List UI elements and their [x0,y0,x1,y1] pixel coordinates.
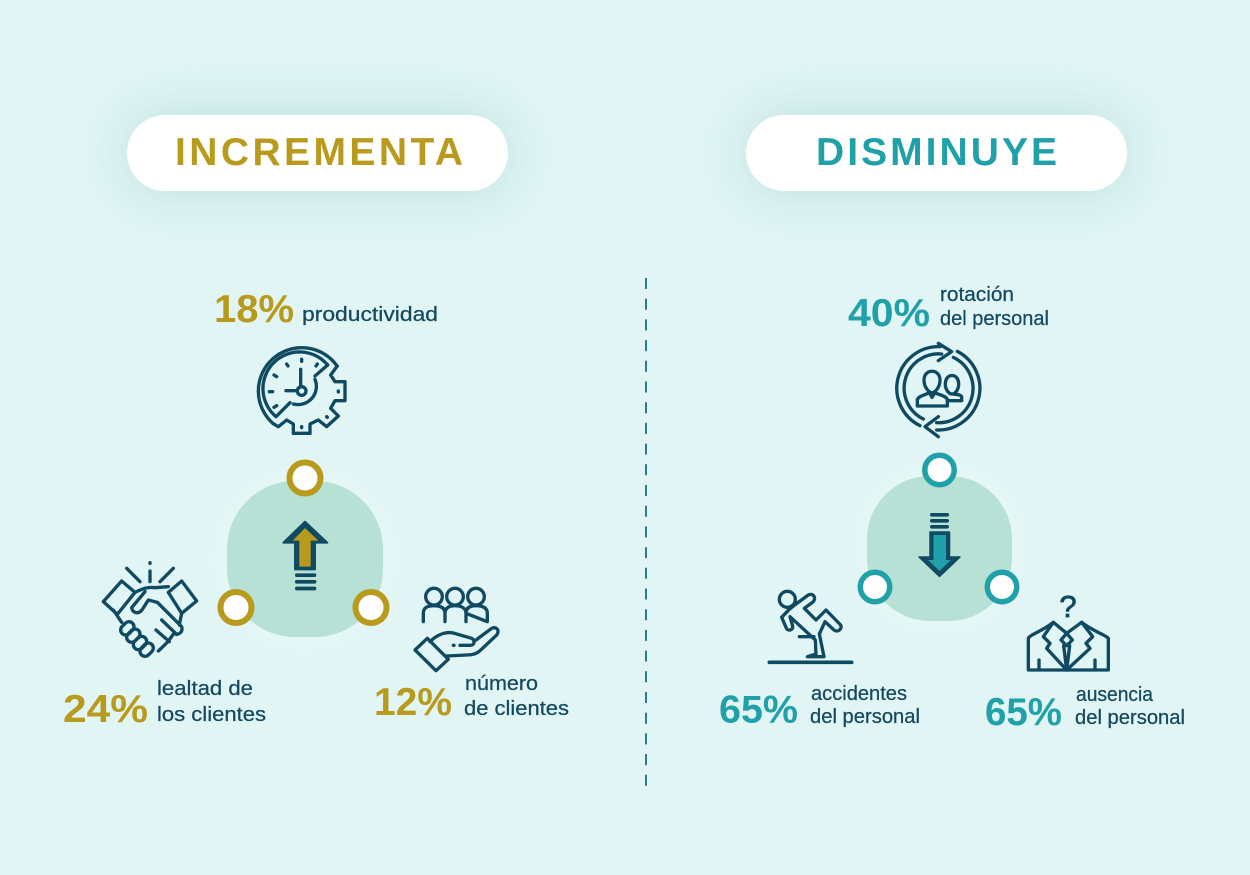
stat: 40% rotacion del personal: rotación [940,284,1014,306]
icon: staff rotation [897,343,980,437]
heading: incrementa [127,115,508,191]
stat: 40% rotacion del personal: 40% [848,292,930,335]
heading: incrementa: INCREMENTA [175,131,463,174]
panel: disminuye [719,284,1185,734]
stat: 65% ausencia del personal: del personal [1075,707,1185,729]
icon: falling person [769,591,852,662]
central blob with arrow up [227,481,383,637]
stat: 65% accidentes del personal: del personal [810,706,920,728]
icon: handshake [103,563,197,658]
heading: disminuye [746,115,1127,191]
stat: 12% numero de clientes: 12% [374,681,452,724]
icon: people in hand [415,588,498,671]
stat: 40% rotacion del personal [848,284,1049,335]
stat: 65% accidentes del personal: 65% [719,688,798,732]
stat: 40% rotacion del personal: del personal [940,308,1049,330]
central blob with arrow down [867,476,1012,621]
node rings [860,455,1017,602]
stat: 24% lealtad de los clientes [63,678,266,731]
stat: 24% lealtad de los clientes: lealtad de [157,678,253,700]
heading: disminuye: DISMINUYE [816,131,1057,174]
stat: 12% numero de clientes [374,673,569,724]
stat: 65% ausencia del personal: ausencia [1076,684,1154,706]
stat: 65% accidentes del personal [719,683,920,732]
stat: 65% accidentes del personal: accidentes [811,683,907,705]
icon: clock gear [258,348,345,433]
stat: 18% productividad: productividad [302,304,438,326]
stat: 12% numero de clientes: de clientes [464,698,569,720]
panel: incrementa [63,288,569,731]
stat: 18% productividad [214,288,438,331]
stat: 18% productividad: 18% [214,288,294,331]
stat: 24% lealtad de los clientes: los clientes [157,704,266,726]
icon: empty suit with question mark [1028,589,1108,670]
stat: 12% numero de clientes: número [465,673,538,695]
icon: empty suit with question mark: ? [1059,589,1077,624]
stat: 65% ausencia del personal: 65% [985,691,1062,734]
stat: 65% ausencia del personal [985,684,1185,734]
node rings [220,462,386,623]
stat: 24% lealtad de los clientes: 24% [63,688,148,731]
